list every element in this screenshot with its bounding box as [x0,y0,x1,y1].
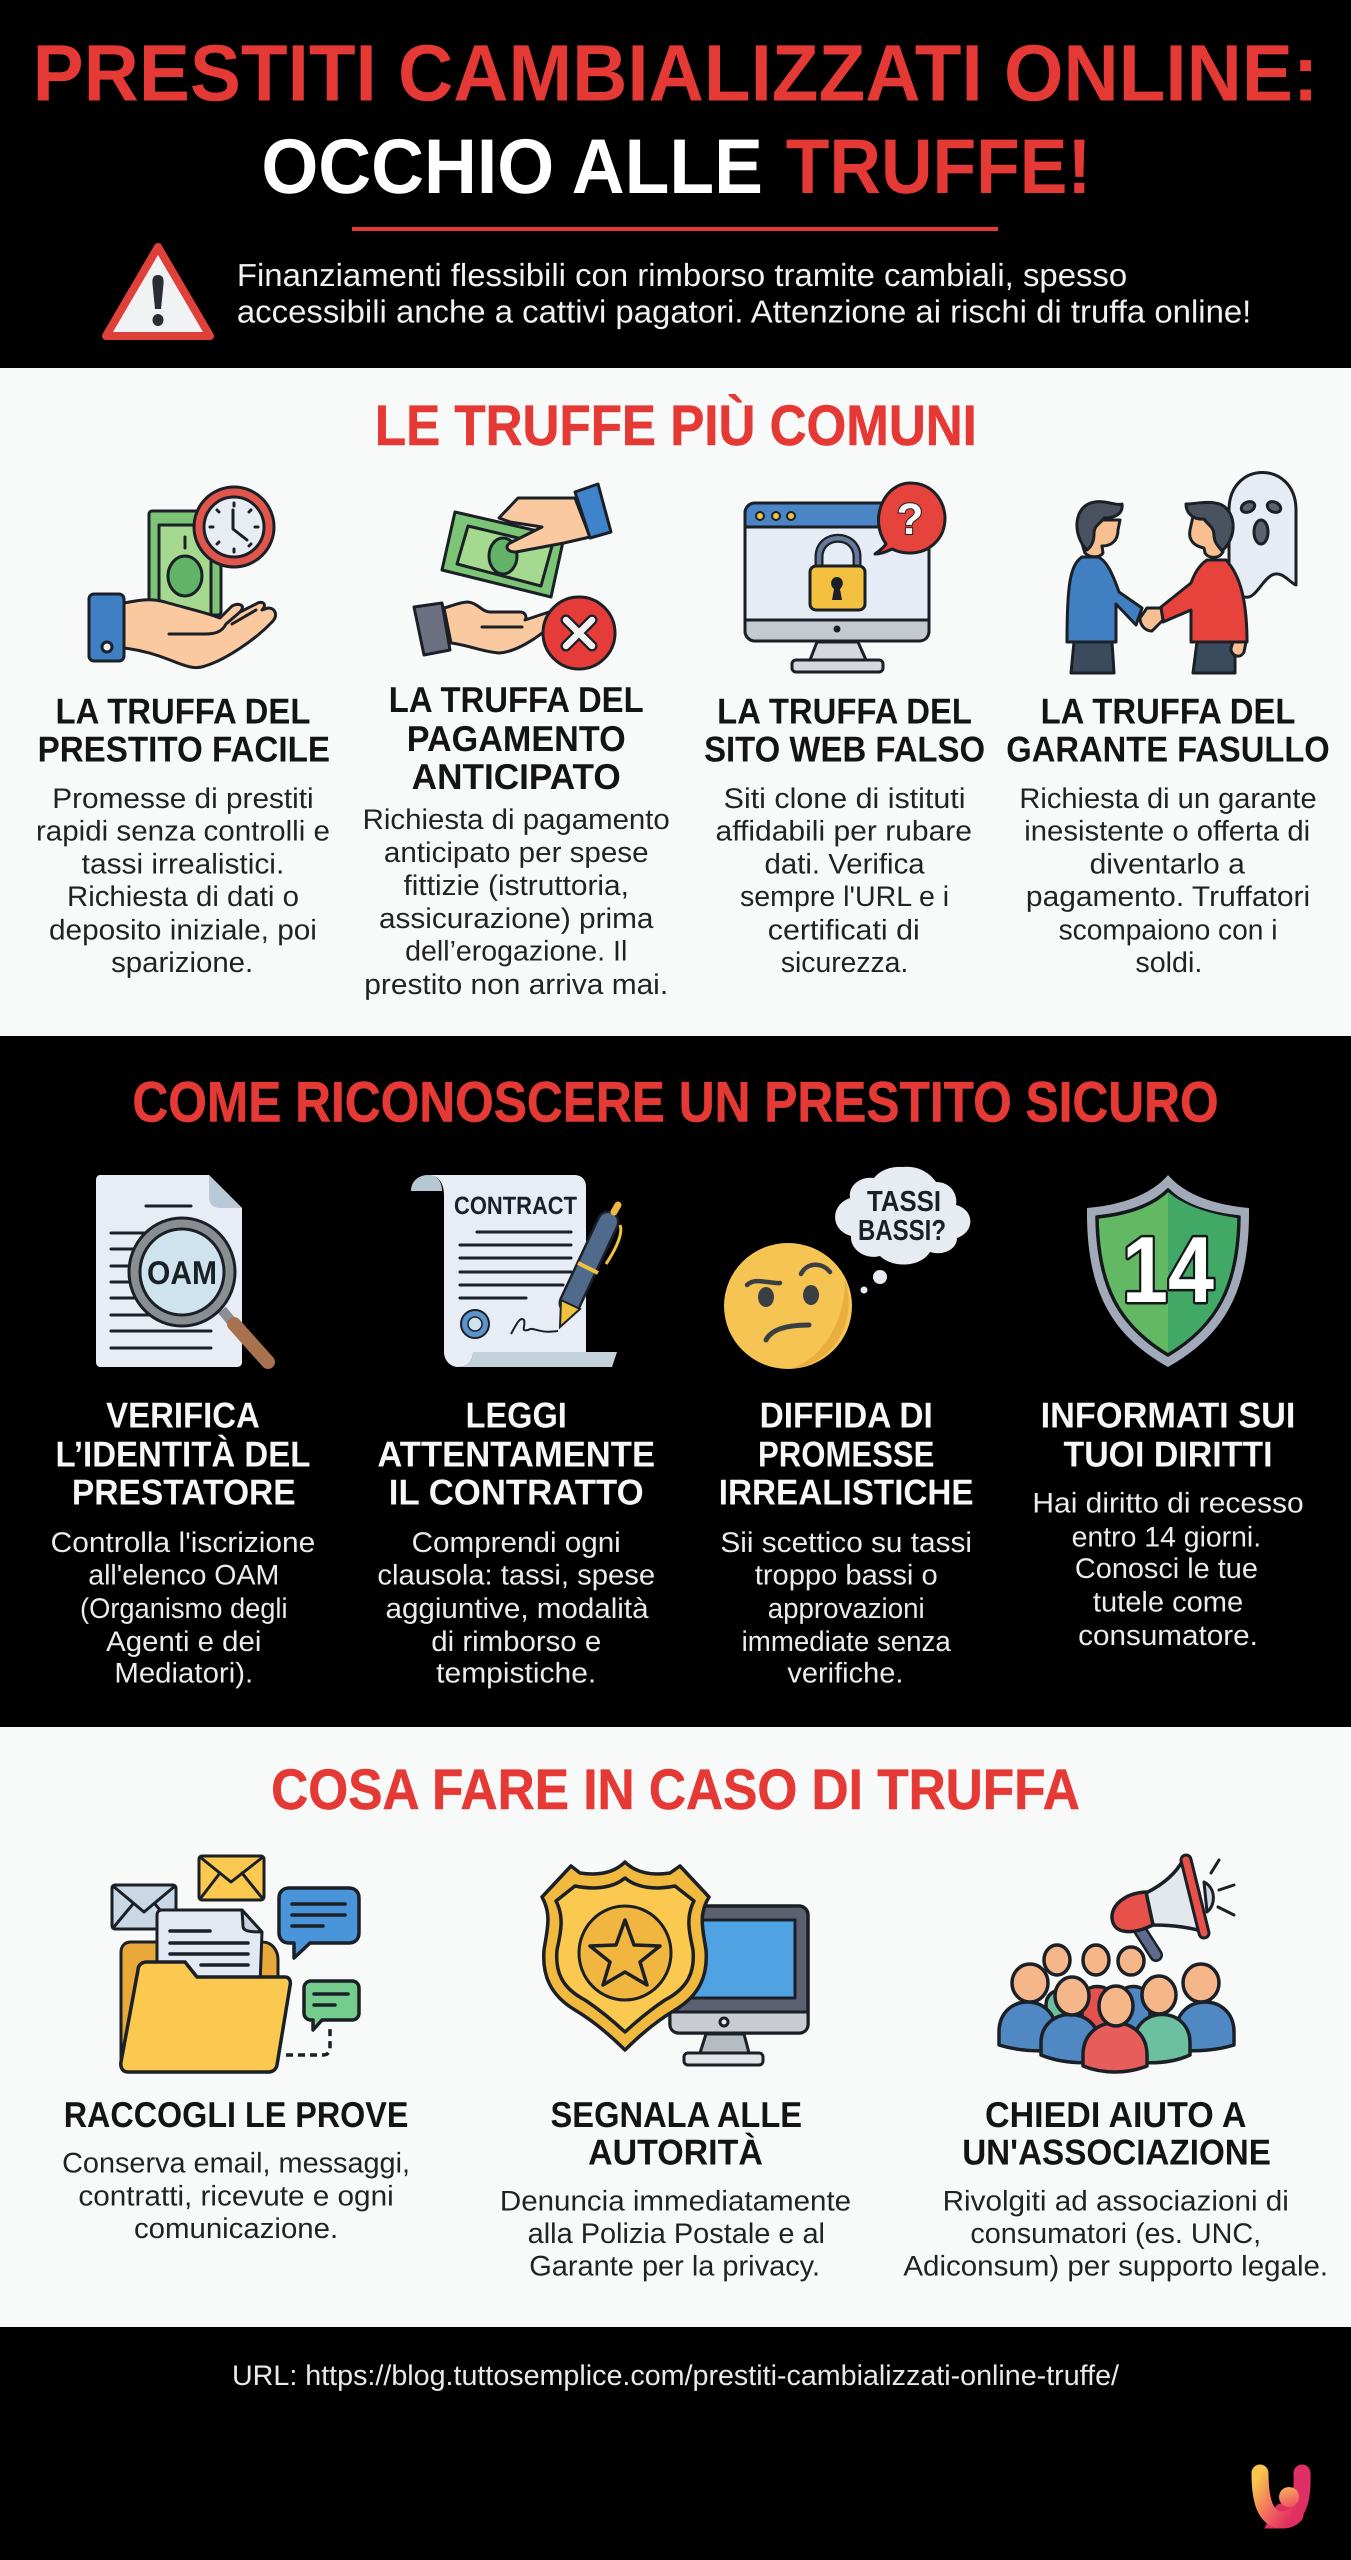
intro text: accessibili anche a cattivi pagatori. Attenzione ai rischi di truffa online! [237,295,1251,331]
column: truffa del sito web falso: sicurezza. [781,946,908,979]
column: truffa del prestito facile: Richiesta di dati o [67,880,299,913]
column: verifica identità: all'elenco OAM [88,1558,279,1591]
icon: doubtful face with thought bubble: BASSI? [858,1215,946,1247]
column: chiedi aiuto a un'associazione [903,2094,1328,2282]
icon: contract with pen [411,1175,621,1367]
column: diffida di promesse irrealistiche [719,1395,974,1689]
column: truffa del sito web falso: LA TRUFFA DEL [717,691,972,732]
column: truffa del garante fasullo: Richiesta di un garante [1019,782,1317,815]
column: diffida di promesse irrealistiche: immediate senza [742,1625,951,1658]
icon: document with OAM magnifier [96,1175,268,1367]
column: verifica identità: Controlla l'iscrizione [51,1526,315,1558]
column: informati sui tuoi diritti: tutele come [1093,1586,1243,1618]
column: informati sui tuoi diritti [1032,1395,1304,1652]
column: leggi il contratto: Comprendi ogni [412,1526,621,1558]
icon: logo [1260,2473,1302,2520]
column: informati sui tuoi diritti: consumatore. [1078,1619,1258,1652]
column: raccogli le prove: RACCOGLI LE PROVE [64,2094,408,2135]
column: truffa del pagamento anticipato: anticipato per spese [384,836,649,869]
icon: doubtful face with thought bubble [724,1167,970,1369]
title: OCCHIO ALLE [261,124,763,211]
column: truffa del pagamento anticipato: prestito non arriva mai. [364,968,668,1001]
panel: footer [0,2327,1351,2560]
column: diffida di promesse irrealistiche: PROMESSE [758,1434,934,1474]
column: raccogli le prove [62,2094,410,2245]
column: leggi il contratto: ATTENTAMENTE [377,1434,655,1474]
column: truffa del prestito facile: Promesse di prestiti [52,782,314,815]
column: truffa del sito web falso: SITO WEB FALSO [704,729,985,769]
panel: le truffe più comuni [0,368,1351,1036]
column: raccogli le prove: Conserva email, messaggi, [62,2147,410,2179]
column: raccogli le prove: contratti, ricevute e ogni [78,2179,394,2212]
icon: crowd with megaphone [999,1860,1234,2072]
column: chiedi aiuto a un'associazione: Rivolgiti ad associazioni di [943,2184,1289,2217]
column: truffa del sito web falso: dati. Verifica [765,847,925,880]
column: segnala alle autorità: SEGNALA ALLE [551,2094,802,2135]
column: truffa del sito web falso [704,691,985,979]
source url: URL: https://blog.tuttosemplice.com/prestiti-cambializzati-online-truffe/ [232,2359,1119,2392]
column: truffa del sito web falso: certificati di [768,913,920,946]
heading: come riconoscere: COME RICONOSCERE UN PRESTITO SICURO [132,1071,1219,1135]
column: leggi il contratto [377,1395,655,1689]
column: truffa del garante fasullo [1006,691,1330,979]
column: verifica identità: PRESTATORE [72,1472,296,1513]
column: diffida di promesse irrealistiche: verifiche. [787,1656,903,1689]
panel: header [0,0,1351,368]
icon: document with OAM magnifier: OAM [147,1254,217,1291]
title: TRUFFE! [786,124,1091,211]
intro text [237,258,1251,331]
column: truffa del pagamento anticipato: ANTICIPATO [412,756,621,797]
column: leggi il contratto: IL CONTRATTO [389,1472,644,1513]
column: truffa del prestito facile: deposito iniziale, poi [49,913,317,946]
column: diffida di promesse irrealistiche: approvazioni [768,1592,925,1624]
column: truffa del prestito facile: PRESTITO FACILE [38,729,330,769]
column: informati sui tuoi diritti: entro 14 giorni. [1072,1520,1261,1553]
column: segnala alle autorità: AUTORITÀ [588,2132,763,2173]
column: truffa del prestito facile: tassi irrealistici. [82,847,284,880]
column: diffida di promesse irrealistiche: DIFFIDA DI [760,1395,933,1435]
icon: fake website with lock [745,483,945,672]
icon: hand with money and clock [89,487,275,668]
column: truffa del garante fasullo: soldi. [1135,946,1202,979]
column: verifica identità: VERIFICA [106,1395,260,1435]
column: segnala alle autorità [500,2094,851,2282]
column: truffa del garante fasullo: LA TRUFFA DEL [1041,691,1295,732]
column: verifica identità: L’IDENTITÀ DEL [56,1434,310,1474]
column: verifica identità: Mediatori). [114,1656,253,1689]
heading: cosa fare: COSA FARE IN CASO DI TRUFFA [271,1759,1080,1822]
heading: le truffe più comuni: LE TRUFFE PIÙ COMUNI [375,393,977,458]
title [33,30,1318,211]
icon: hands passing money with red cross [414,484,615,669]
column: truffa del prestito facile: sparizione. [111,946,253,979]
column: chiedi aiuto a un'associazione: consumatori (es. UNC, [970,2217,1261,2249]
column: leggi il contratto: clausola: tassi, spese [377,1558,655,1591]
column: leggi il contratto: tempistiche. [436,1656,596,1689]
column: truffa del pagamento anticipato: LA TRUFFA DEL [389,680,644,720]
column: leggi il contratto: di rimborso e [431,1625,601,1658]
column: truffa del pagamento anticipato: dell’erogazione. Il [405,934,627,967]
column: truffa del pagamento anticipato: fittizie (istruttoria, [403,869,629,902]
column: truffa del garante fasullo: scompaiono con i [1059,913,1277,946]
column: diffida di promesse irrealistiche: IRREALISTICHE [719,1472,974,1513]
column: leggi il contratto: LEGGI [466,1395,567,1435]
column: segnala alle autorità: alla Polizia Postale e al [528,2217,825,2249]
column: verifica identità [51,1395,315,1689]
intro text: Finanziamenti flessibili con rimborso tramite cambiali, spesso [237,258,1127,294]
column: truffa del garante fasullo: pagamento. Truffatori [1026,880,1310,913]
column: informati sui tuoi diritti: TUOI DIRITTI [1063,1434,1273,1474]
column: truffa del prestito facile: rapidi senza controlli e [36,814,330,847]
column: verifica identità: Agenti e dei [106,1625,261,1658]
column: truffa del prestito facile: LA TRUFFA DEL [56,691,310,732]
icon: handshake with ghost guarantor [1067,472,1296,673]
column: segnala alle autorità: Garante per la privacy. [529,2249,820,2282]
column: truffa del pagamento anticipato: PAGAMENTO [407,718,626,759]
column: verifica identità: (Organismo degli [80,1592,288,1624]
column: truffa del pagamento anticipato: assicurazione) prima [379,902,654,934]
column: leggi il contratto: aggiuntive, modalità [386,1592,649,1624]
icon: warning triangle [106,247,210,336]
column: truffa del garante fasullo: inesistente o offerta di [1024,814,1310,847]
title: PRESTITI CAMBIALIZZATI ONLINE: [33,30,1318,118]
icon: contract with pen: CONTRACT [454,1192,577,1220]
column: chiedi aiuto a un'associazione: Adiconsum) per supporto legale. [903,2249,1328,2282]
icon: police badge and computer [542,1862,808,2065]
column: truffa del sito web falso: sempre l'URL e i [740,880,949,913]
icon: fake website with lock: ? [897,495,923,544]
column: truffa del pagamento anticipato [363,680,670,1001]
column: raccogli le prove: comunicazione. [134,2212,338,2245]
panel: come riconoscere un prestito sicuro [0,1036,1351,1727]
column: informati sui tuoi diritti: Hai diritto di recesso [1032,1487,1304,1519]
column: diffida di promesse irrealistiche: Sii scettico su tassi [720,1526,972,1558]
column: truffa del sito web falso: Siti clone di istituti [724,782,965,815]
column: chiedi aiuto a un'associazione: CHIEDI AIUTO A [985,2094,1247,2135]
icon: doubtful face with thought bubble: TASSI [867,1186,941,1218]
column: truffa del pagamento anticipato: Richiesta di pagamento [363,803,670,835]
column: truffa del garante fasullo: diventarlo a [1090,847,1245,880]
panel: cosa fare in caso di truffa [0,1727,1351,2327]
column: informati sui tuoi diritti: INFORMATI SUI [1041,1395,1295,1435]
column: diffida di promesse irrealistiche: troppo bassi o [755,1558,938,1591]
column: truffa del sito web falso: affidabili per rubare [716,814,972,847]
column: informati sui tuoi diritti: Conosci le tue [1075,1552,1258,1585]
icon: folder with evidence [112,1856,359,2072]
column: truffa del prestito facile [36,691,330,979]
icon: shield with 14: 14 [1122,1217,1214,1322]
column: segnala alle autorità: Denuncia immediatamente [500,2184,851,2217]
icon: shield with 14 [1087,1175,1249,1367]
column: chiedi aiuto a un'associazione: UN'ASSOCIAZIONE [962,2132,1271,2173]
